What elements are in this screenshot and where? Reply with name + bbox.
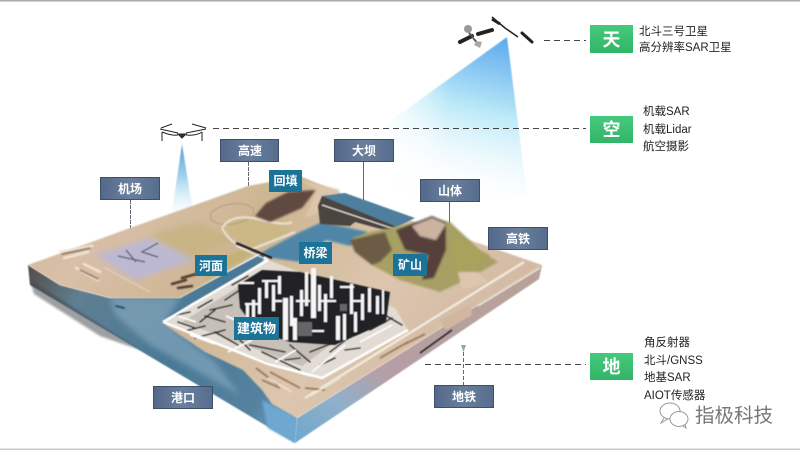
dam <box>318 193 415 232</box>
text: ground sensors: 角反射器 <box>644 335 690 349</box>
upper-left mound <box>255 180 340 222</box>
label: 机场 <box>100 178 160 200</box>
badge: 地: 地 <box>602 357 620 377</box>
text: air sensors: 机载Lidar <box>643 122 692 136</box>
text: air sensors <box>643 104 692 153</box>
tag: 建筑物 <box>234 317 279 340</box>
text: space sensors: 北斗三号卫星 <box>639 25 708 38</box>
label: 山体: 山体 <box>438 183 462 198</box>
satellite coverage beam <box>370 30 527 200</box>
city island <box>163 260 408 378</box>
dark road <box>236 243 272 258</box>
label: 高速 <box>220 140 278 162</box>
icon: satellite <box>460 17 532 48</box>
tag: 回填 <box>269 170 302 192</box>
sand strip details <box>256 334 425 396</box>
tag: 回填: 回填 <box>273 173 298 188</box>
label: 山体 <box>420 180 480 202</box>
label: 港口: 港口 <box>171 390 195 405</box>
tag: 河面: 河面 <box>199 259 223 273</box>
terrain block <box>28 176 542 443</box>
text: air sensors: 机载SAR <box>643 104 690 118</box>
text: ground sensors <box>644 335 706 402</box>
text: space sensors <box>639 25 732 54</box>
quarry and mountain <box>350 216 498 292</box>
label: 高速: 高速 <box>238 143 262 158</box>
icon: subway marker <box>461 345 466 352</box>
tag: 矿山 <box>393 254 427 276</box>
dashed connector lines <box>213 40 586 364</box>
badge: 地 <box>590 353 633 380</box>
label: 高铁 <box>488 228 548 250</box>
text: space sensors: 高分辨率SAR卫星 <box>639 40 732 54</box>
text: ground sensors: 地基SAR <box>644 371 691 384</box>
tag: 河面 <box>195 255 227 276</box>
lake behind dam <box>262 222 368 262</box>
label: 大坝: 大坝 <box>352 143 376 158</box>
badge: 空: 空 <box>602 119 620 140</box>
label: 机场: 机场 <box>118 181 142 196</box>
airport <box>95 238 195 280</box>
drone sensing beam <box>172 144 193 212</box>
text: air sensors: 航空摄影 <box>643 139 689 153</box>
tag: 桥梁 <box>299 242 332 264</box>
tag: 矿山: 矿山 <box>398 257 422 272</box>
text: ground sensors: 北斗/GNSS <box>644 354 703 367</box>
icon: wechat watermark <box>660 403 688 428</box>
label: 高铁: 高铁 <box>506 231 530 246</box>
badge: 天: 天 <box>602 30 620 50</box>
label: 大坝 <box>334 140 394 162</box>
left side and water <box>28 252 297 443</box>
text: ground sensors: AIOT传感器 <box>644 388 706 402</box>
badge: 天 <box>590 25 633 53</box>
tag: 桥梁: 桥梁 <box>303 245 328 260</box>
highway loops <box>209 201 295 250</box>
tag: 建筑物: 建筑物 <box>237 321 276 336</box>
watermark text: 指极科技 <box>695 405 773 427</box>
label: 港口 <box>154 386 212 408</box>
yellow fields <box>150 222 235 262</box>
badge: 空 <box>590 116 633 143</box>
coast details <box>60 246 196 308</box>
rail track along right edge <box>305 262 540 398</box>
icon: drone <box>160 124 206 141</box>
leader lines <box>130 162 464 385</box>
label: 地铁 <box>434 386 494 408</box>
label: 地铁: 地铁 <box>452 389 476 404</box>
land surface <box>28 176 542 418</box>
high-rise buildings <box>238 268 390 345</box>
right side wall <box>295 265 542 443</box>
